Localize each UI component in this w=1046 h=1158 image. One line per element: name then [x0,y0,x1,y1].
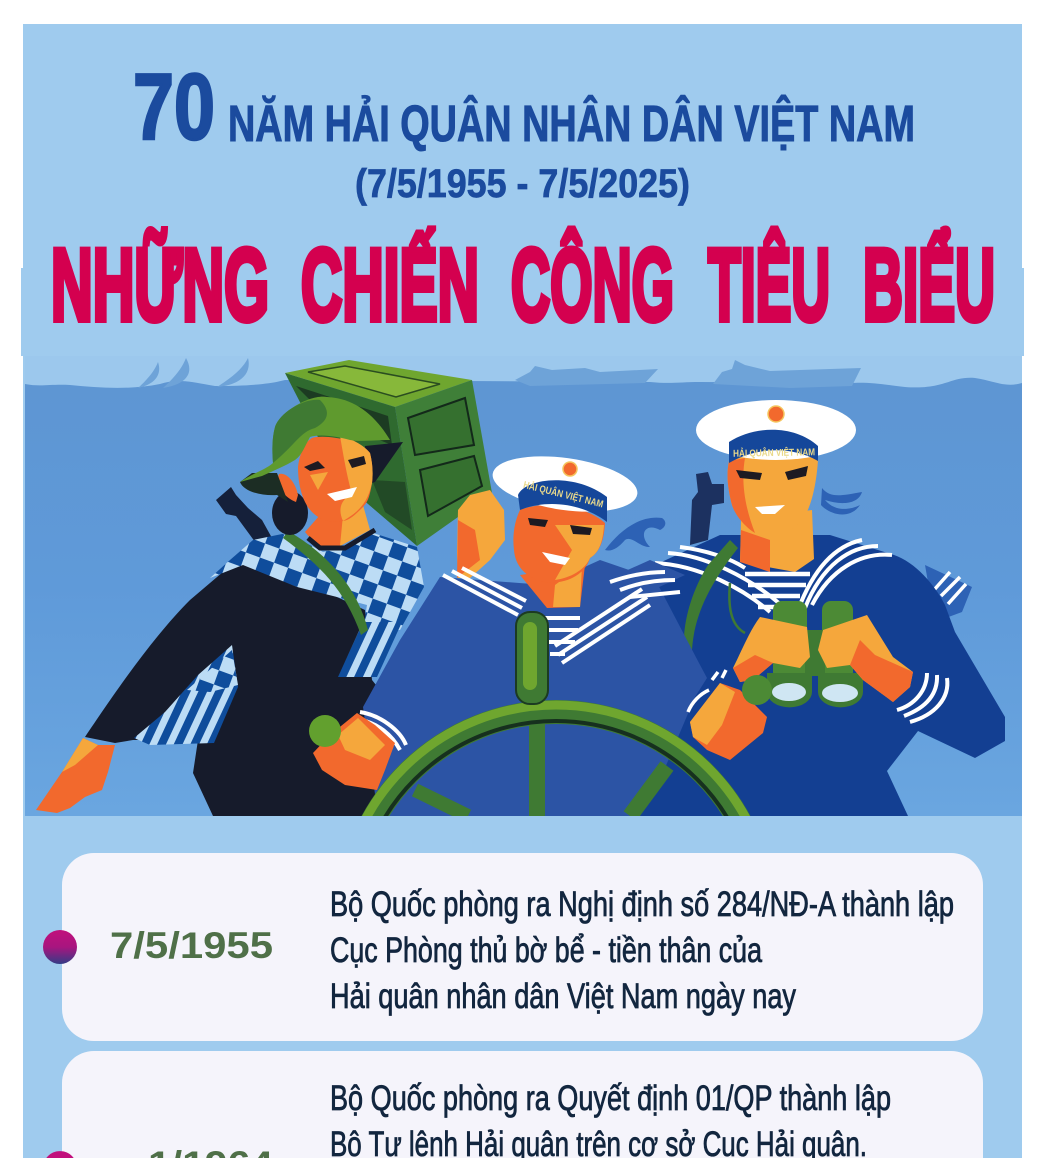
cap badge [563,462,577,476]
heading: những chiến công tiêu biểu: CHIẾN [301,228,479,342]
illustration: navy poster [25,358,1022,816]
heading: những chiến công tiêu biểu: TIÊU [708,228,830,342]
sailor: woman with checked scarf [85,397,424,816]
rim [347,712,765,1130]
sailor: right with binoculars [600,400,1005,816]
shirt stripes [545,618,580,654]
card: 1/1964 [46,1051,983,1158]
sky and horizon [25,356,1022,388]
date: 7/5/1955 [110,925,273,966]
card: 7/5/1955 [43,853,983,1041]
face [513,505,605,583]
face [728,457,818,519]
cap [696,400,856,460]
sailor: woman's rifle [216,487,271,540]
title: 70 years [133,54,915,159]
heading: những chiến công tiêu biểu: NHỮNG [51,228,269,342]
timeline dot [46,1151,74,1158]
timeline dot [43,930,77,964]
collar stripes [655,540,947,722]
lower scarf tail [134,645,238,745]
uniform [363,560,707,816]
hair ribbon [821,488,862,514]
subtitle: dates: (7/5/1955 - 7/5/2025) [355,162,690,206]
scarf lower stripes [338,622,402,677]
shirt stripes [745,574,810,607]
sea background [25,356,1022,816]
title band [21,268,1024,356]
description [330,885,954,1016]
description: Cục Phòng thủ bờ bể - tiền thân của [330,931,762,970]
left fist on wheel [309,713,395,790]
checked scarf [210,533,424,630]
hands on binoculars [733,615,913,702]
description [330,1079,891,1158]
distant sails and ships [138,358,861,388]
uniform [600,535,1005,816]
back collar flap [925,565,972,622]
description: Bộ Quốc phòng ra Quyết định 01/QP thành lập [330,1079,891,1118]
collar stripes left [443,568,680,663]
rifle [690,472,724,545]
green strap [283,531,368,635]
sailor: right with binoculars: HẢI QUÂN VIỆT NAM [733,445,815,460]
body [85,564,380,816]
hair right [365,442,403,484]
face [298,437,373,522]
binocular strap [729,583,745,633]
sailor: middle with raised hand [360,448,707,816]
neck [740,510,814,572]
ship's wheel [340,612,772,1137]
sailor: middle with raised hand: HẢI QUÂN VIỆT NAM [522,478,605,510]
hair bun [272,491,308,535]
title: 70 years: 70 [133,54,215,159]
spokes [529,720,545,816]
hat [240,397,390,482]
ear [278,474,298,502]
hat underside [240,473,288,502]
shoulder strap [684,540,738,650]
cap [489,448,641,520]
neck [305,508,364,546]
heading: những chiến công tiêu biểu: CÔNG [511,228,674,342]
description: Hải quân nhân dân Việt Nam ngày nay [330,977,796,1016]
neck [520,565,585,608]
ammo box [285,360,492,546]
cap badge [768,406,784,422]
left cuff [360,712,406,750]
binoculars [767,601,863,707]
handle post [516,612,548,704]
raised hand [457,490,505,578]
sailor: woman's pointing hand [36,738,115,813]
blowing ribbon [605,518,665,551]
right fist on wheel [688,670,772,760]
heading: những chiến công tiêu biểu [51,228,995,342]
